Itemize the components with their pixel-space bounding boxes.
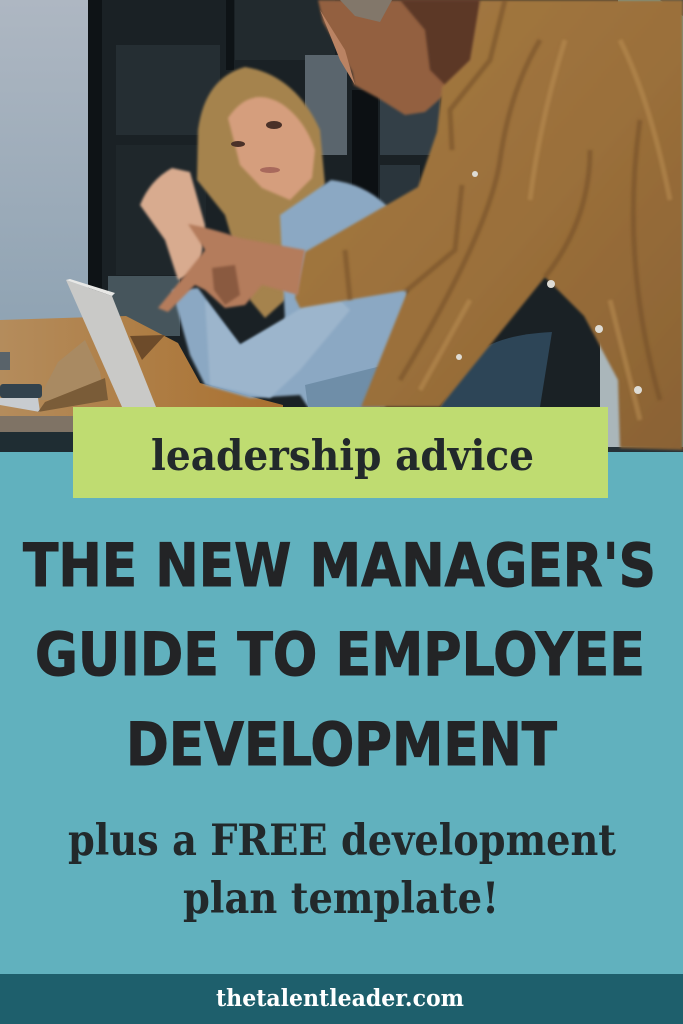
hair back [197,67,325,318]
title: DEVELOPMENT [126,710,557,780]
laptop [66,279,156,407]
shirt [295,0,683,450]
woman's hands [140,168,205,280]
subtitle: plus a FREE development [68,816,616,866]
dark window [88,0,618,407]
eyes and mouth [231,121,282,173]
teal background panel [0,453,683,974]
sweater [172,180,408,407]
office chair [440,332,552,407]
table [0,316,683,452]
wall [0,0,90,330]
title [23,531,656,780]
pointing hand [158,224,305,312]
face [228,97,315,200]
photo: manager talking with employee [0,0,683,452]
chair behind desk [108,276,180,336]
footer bar [0,974,683,1024]
shirt buttons [456,171,642,394]
man [158,0,683,450]
background right [600,0,683,452]
website url: thetalentleader.com [216,985,464,1012]
shirt shading folds [345,0,660,400]
woman [140,67,408,407]
subtitle [68,816,616,924]
tablet and notebook [0,335,165,412]
subtitle: plan template! [183,874,499,924]
green banner [73,407,608,498]
banner text: leadership advice [151,431,534,480]
head [318,0,480,115]
